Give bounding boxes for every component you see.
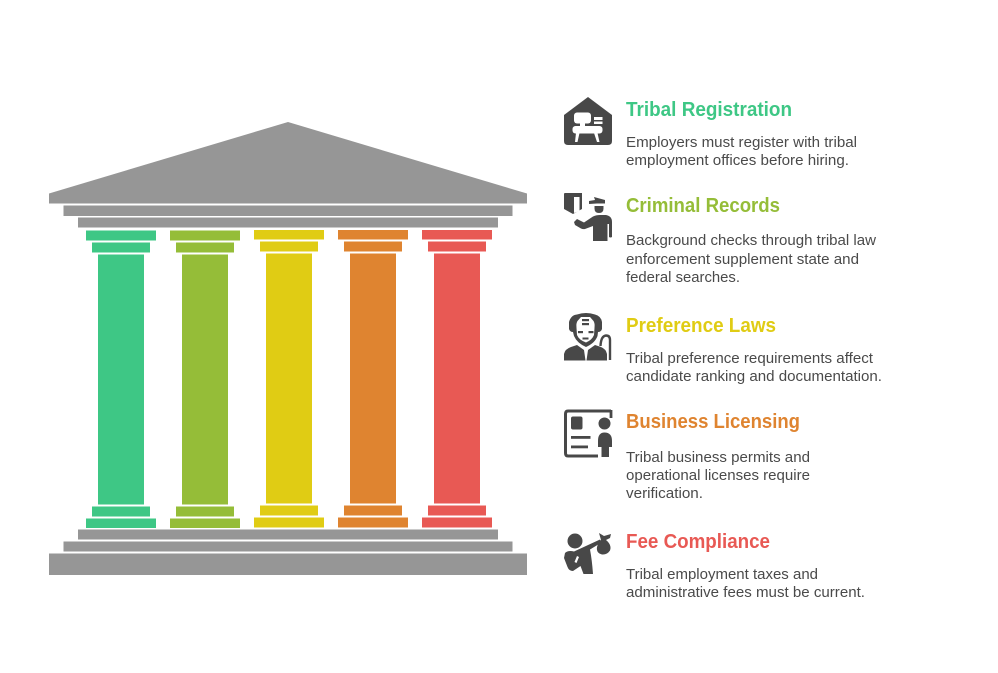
heading: Fee Compliance: Fee Compliance <box>626 530 770 553</box>
pillar: Fee Compliance <box>422 230 492 528</box>
heading: Tribal Registration: Tribal Registration <box>626 98 792 121</box>
text: Tribal Registration description: Employers must register with tribal <box>626 135 857 151</box>
pillar: Preference Laws <box>254 230 324 528</box>
heading: Business Licensing: Business Licensing <box>626 410 800 433</box>
icon: police officer with badge <box>564 193 612 241</box>
text: Criminal Records description: enforcement supplement state and <box>626 252 859 268</box>
temple base <box>49 530 527 575</box>
text: Business Licensing description: operational licenses require <box>626 468 810 484</box>
text: Criminal Records description: Background checks through tribal law <box>626 233 876 249</box>
text: Fee Compliance description <box>626 567 865 601</box>
text: Tribal Registration description <box>626 135 857 169</box>
text: Preference Laws description <box>626 351 882 385</box>
text: Business Licensing description: verification. <box>626 486 703 502</box>
icon: elder with cane <box>564 313 610 360</box>
icon: building with bench <box>564 97 612 145</box>
heading: Criminal Records: Criminal Records <box>626 194 780 217</box>
text: Business Licensing description <box>626 450 810 502</box>
text: Tribal Registration description: employment offices before hiring. <box>626 153 849 169</box>
pillar: Criminal Records <box>170 230 240 528</box>
heading: Preference Laws: Preference Laws <box>626 314 776 337</box>
text: Business Licensing description: Tribal business permits and <box>626 450 810 466</box>
text: Preference Laws description: Tribal preference requirements affect <box>626 351 873 367</box>
text: Criminal Records description: federal searches. <box>626 270 740 286</box>
text: Preference Laws description: candidate ranking and documentation. <box>626 369 882 385</box>
text: Criminal Records description <box>626 233 876 286</box>
pillar: Business Licensing <box>338 230 408 528</box>
pillar: Tribal Registration <box>86 230 156 528</box>
icon: ID card with person <box>566 410 612 457</box>
icon: person carrying bindle <box>564 533 611 574</box>
temple roof <box>49 122 527 228</box>
text: Fee Compliance description: Tribal employment taxes and <box>626 567 818 583</box>
text: Fee Compliance description: administrative fees must be current. <box>626 585 865 601</box>
